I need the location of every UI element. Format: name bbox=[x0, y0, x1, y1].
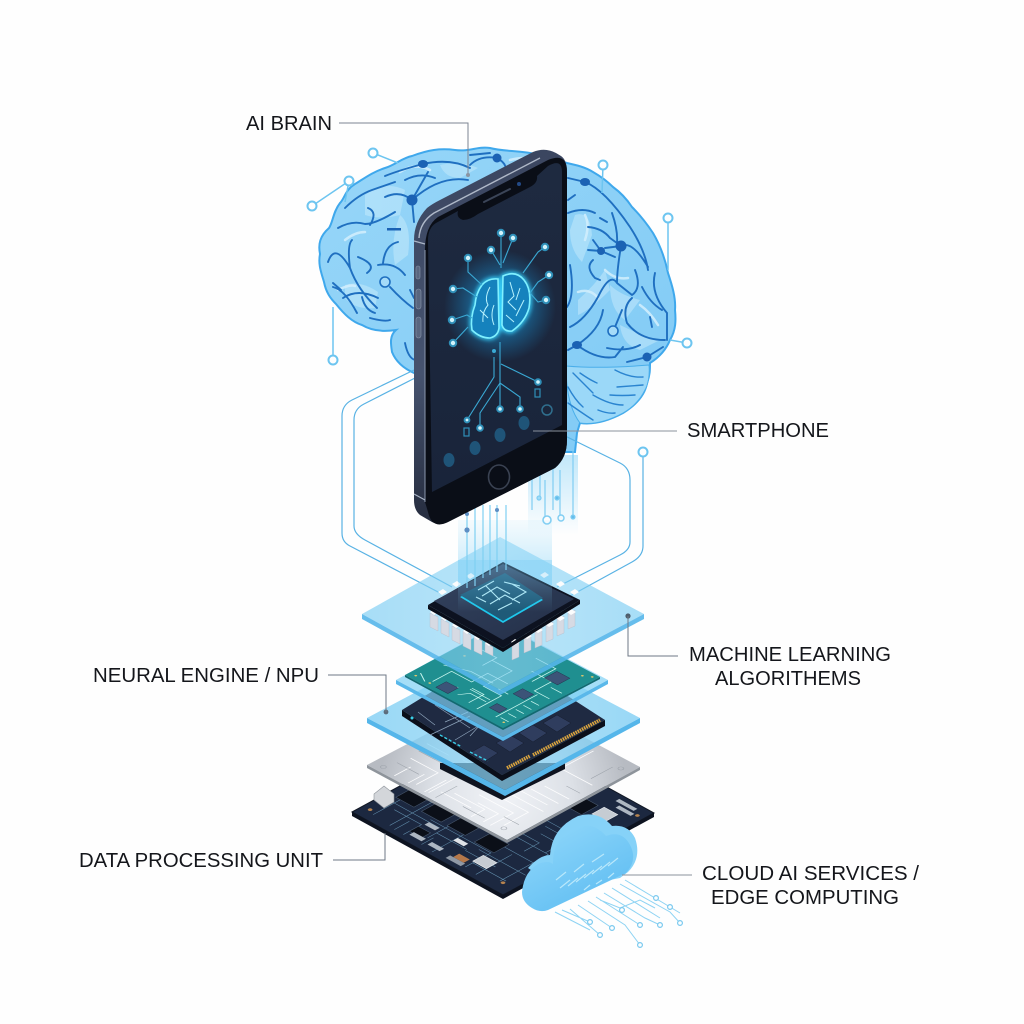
green board gold pads bbox=[414, 628, 594, 724]
label: Machine Learning Algorithems: ALGORITHEMS bbox=[715, 668, 861, 690]
cloud front face bbox=[522, 825, 633, 911]
brain synapse nodes bbox=[387, 154, 652, 362]
brain open nodes bbox=[380, 277, 618, 336]
chip pin tips bbox=[430, 572, 579, 646]
screen ring bbox=[542, 405, 552, 415]
gold contacts bbox=[507, 720, 600, 768]
screen network lines bbox=[452, 233, 549, 427]
label: AI Brain: AI BRAIN bbox=[246, 113, 332, 135]
data traces from cloud bbox=[555, 880, 682, 947]
beam to chip bbox=[458, 520, 552, 585]
black support block bbox=[440, 763, 565, 800]
board mount holes bbox=[367, 737, 641, 888]
layer: dark circuit board bbox=[352, 730, 654, 899]
label: Data Processing Unit bbox=[79, 833, 385, 872]
brain folds bbox=[328, 153, 667, 362]
board traces bbox=[361, 741, 633, 890]
label: AI Brain bbox=[246, 113, 470, 177]
cerebellum folds bbox=[568, 370, 643, 420]
speaker and camera bbox=[484, 189, 510, 202]
phone front bezel bbox=[425, 158, 567, 524]
light stream right bbox=[528, 455, 578, 535]
ray nodes bbox=[464, 508, 499, 533]
cerebellum bbox=[566, 365, 649, 423]
label: Machine Learning Algorithems bbox=[628, 616, 891, 690]
main processor chip bbox=[428, 505, 580, 660]
chip top bbox=[434, 564, 574, 640]
cloud circuit ticks bbox=[556, 854, 618, 890]
home button bbox=[488, 465, 510, 489]
screen brain glow bbox=[444, 250, 556, 362]
phone body bbox=[414, 150, 567, 524]
memory cells bbox=[470, 745, 498, 762]
label: Machine Learning Algorithems: MACHINE LEARNING bbox=[689, 644, 891, 666]
stream traces bbox=[532, 450, 575, 524]
screen brain folds bbox=[480, 282, 524, 325]
board small parts bbox=[405, 758, 640, 888]
phone highlight edge bbox=[419, 158, 540, 238]
label: Smartphone: SMARTPHONE bbox=[687, 420, 829, 442]
beam over chip bbox=[458, 560, 552, 612]
panel marker bbox=[384, 710, 388, 714]
screen brain bbox=[471, 274, 530, 338]
label: Neural Engine / NPU: NEURAL ENGINE / NPU bbox=[93, 665, 319, 687]
data streams below phone bbox=[458, 450, 578, 585]
chip die bbox=[460, 574, 543, 623]
green board chips bbox=[436, 647, 570, 719]
label: Neural Engine / NPU bbox=[93, 665, 386, 712]
board chips bbox=[372, 746, 598, 870]
brain highlights bbox=[338, 158, 658, 325]
chip base bbox=[428, 562, 580, 648]
label: Cloud AI Services / Edge Computing: CLOUD AI SERVICES / bbox=[702, 863, 919, 885]
layer: green circuit board bbox=[405, 624, 600, 730]
screen brain blur halo bbox=[471, 274, 530, 338]
circuit lines from phone to chip bbox=[342, 370, 648, 596]
chip pins bbox=[430, 610, 575, 660]
label: Cloud AI Services / Edge Computing bbox=[622, 863, 919, 909]
layer: memory module bbox=[402, 651, 605, 781]
brain bbox=[308, 148, 692, 452]
silver heatsink parts bbox=[374, 786, 394, 808]
chip rays from above bbox=[467, 505, 506, 588]
brain highlight patches bbox=[345, 163, 660, 350]
chip die circuit bbox=[476, 581, 526, 610]
external connector nodes bbox=[308, 148, 692, 364]
cloud back face bbox=[528, 814, 637, 890]
app dock bbox=[444, 416, 530, 467]
label: Cloud AI Services / Edge Computing: EDGE COMPUTING bbox=[711, 887, 899, 909]
memory scratches bbox=[418, 705, 480, 740]
layer: silver circuit plate bbox=[367, 694, 640, 843]
brain silhouette bbox=[319, 148, 675, 452]
panel marker bbox=[625, 613, 631, 619]
side buttons bbox=[416, 266, 421, 338]
layer: upper glass panel bbox=[362, 537, 644, 695]
screen nodes bbox=[449, 230, 552, 436]
memory status text strokes bbox=[440, 735, 488, 761]
label: Data Processing Unit: DATA PROCESSING UNIT bbox=[79, 850, 323, 872]
cloud services bbox=[522, 814, 682, 947]
layer: lower glass panel bbox=[367, 646, 640, 796]
layer: middle glass panel bbox=[396, 623, 608, 741]
phone screen bbox=[428, 163, 562, 492]
green board traces bbox=[415, 635, 582, 724]
smartphone bbox=[414, 150, 567, 524]
plate traces bbox=[381, 703, 626, 834]
